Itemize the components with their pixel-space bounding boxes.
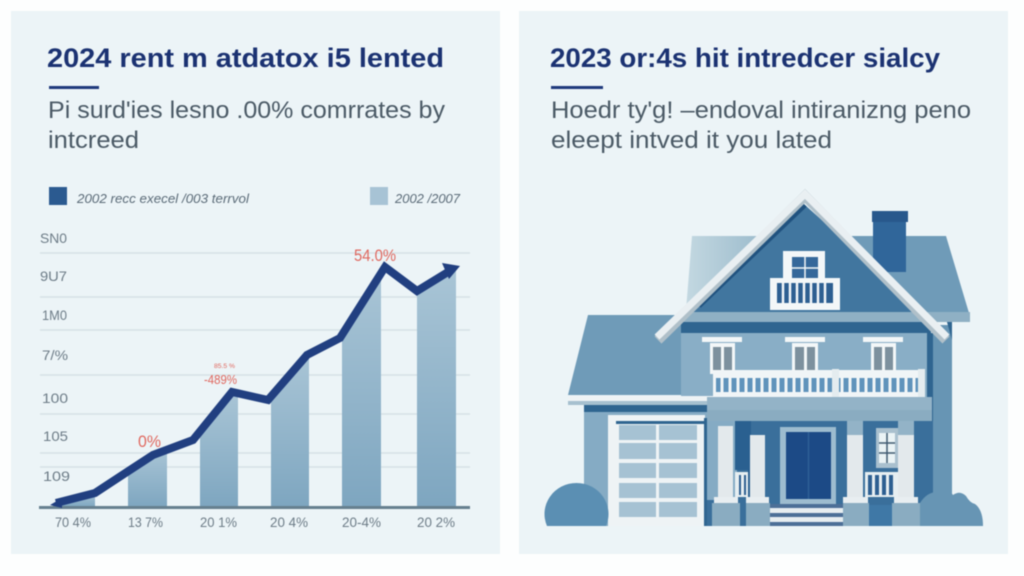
chart: bars with rising line (39, 230, 470, 530)
text block: right description (551, 97, 971, 154)
heading underline right (551, 86, 603, 89)
y axis labels: 105 (43, 428, 68, 444)
legend: 2002 /2007 (394, 191, 461, 206)
porch (707, 369, 933, 526)
y axis labels: 100 (42, 390, 68, 406)
porch side railings (735, 472, 898, 526)
axis baseline (39, 506, 470, 509)
x axis labels: 20-4% (342, 514, 381, 530)
roof eaves (657, 194, 947, 340)
illustration: house (544, 194, 983, 526)
porch columns (712, 421, 920, 526)
lower storey (584, 405, 708, 526)
x axis labels: 70 4% (55, 514, 91, 530)
gable balcony and window (770, 251, 840, 310)
heading: left title: 2024 rent m atdatox i5 lented (47, 43, 444, 73)
upper storey (681, 322, 927, 397)
x axis labels: 20 1% (200, 514, 237, 530)
x axis labels: 20 2% (417, 514, 455, 530)
lower eave (568, 396, 713, 401)
porch balcony railing (713, 369, 925, 398)
callouts: red percentages: 85.5 % (214, 364, 236, 370)
heading underline left (49, 86, 99, 89)
y axis labels (40, 230, 70, 484)
y axis labels: 1M0 (42, 307, 67, 323)
chimney (872, 211, 908, 272)
x axis labels: 20 4% (270, 514, 308, 530)
callouts: red percentages (138, 246, 396, 451)
garage door (608, 415, 707, 526)
front door (780, 427, 836, 504)
lower roof left (568, 315, 712, 395)
y axis labels: 9U7 (40, 268, 67, 284)
panel: rent chart (11, 11, 500, 554)
y axis labels: SN0 (40, 230, 67, 246)
callouts: red percentages: 0% (138, 432, 161, 451)
legend (49, 187, 461, 206)
bars (53, 268, 456, 507)
bush left (544, 483, 609, 526)
right porch window (876, 428, 898, 468)
trend line with arrow (50, 263, 460, 508)
upper roofs (686, 236, 760, 310)
text block: left description (48, 97, 445, 154)
text block: right description: eleept intved it you lated (551, 127, 832, 154)
x axis labels: 13 7% (128, 514, 163, 530)
legend: 2002 recc execel /003 terrvol (76, 191, 250, 206)
y axis labels: 7/% (42, 347, 68, 363)
x axis labels (55, 514, 455, 530)
text block: right description: Hoedr ty'g! –endoval intiranizng peno (551, 97, 971, 124)
heading: right title: 2023 or:4s hit intredcer sialcy (550, 43, 940, 73)
bush right (920, 491, 983, 526)
text block: left description: Pi surd'ies lesno .00% comrrates by (48, 97, 445, 124)
panel: house (519, 11, 1008, 554)
steps (770, 504, 845, 526)
upper windows (702, 337, 903, 374)
gable (692, 205, 925, 313)
y axis labels: 109 (43, 468, 70, 484)
callouts: red percentages: -489% (204, 372, 237, 387)
text block: left description: intcreed (48, 127, 139, 154)
callouts: red percentages: 54.0% (354, 246, 396, 265)
